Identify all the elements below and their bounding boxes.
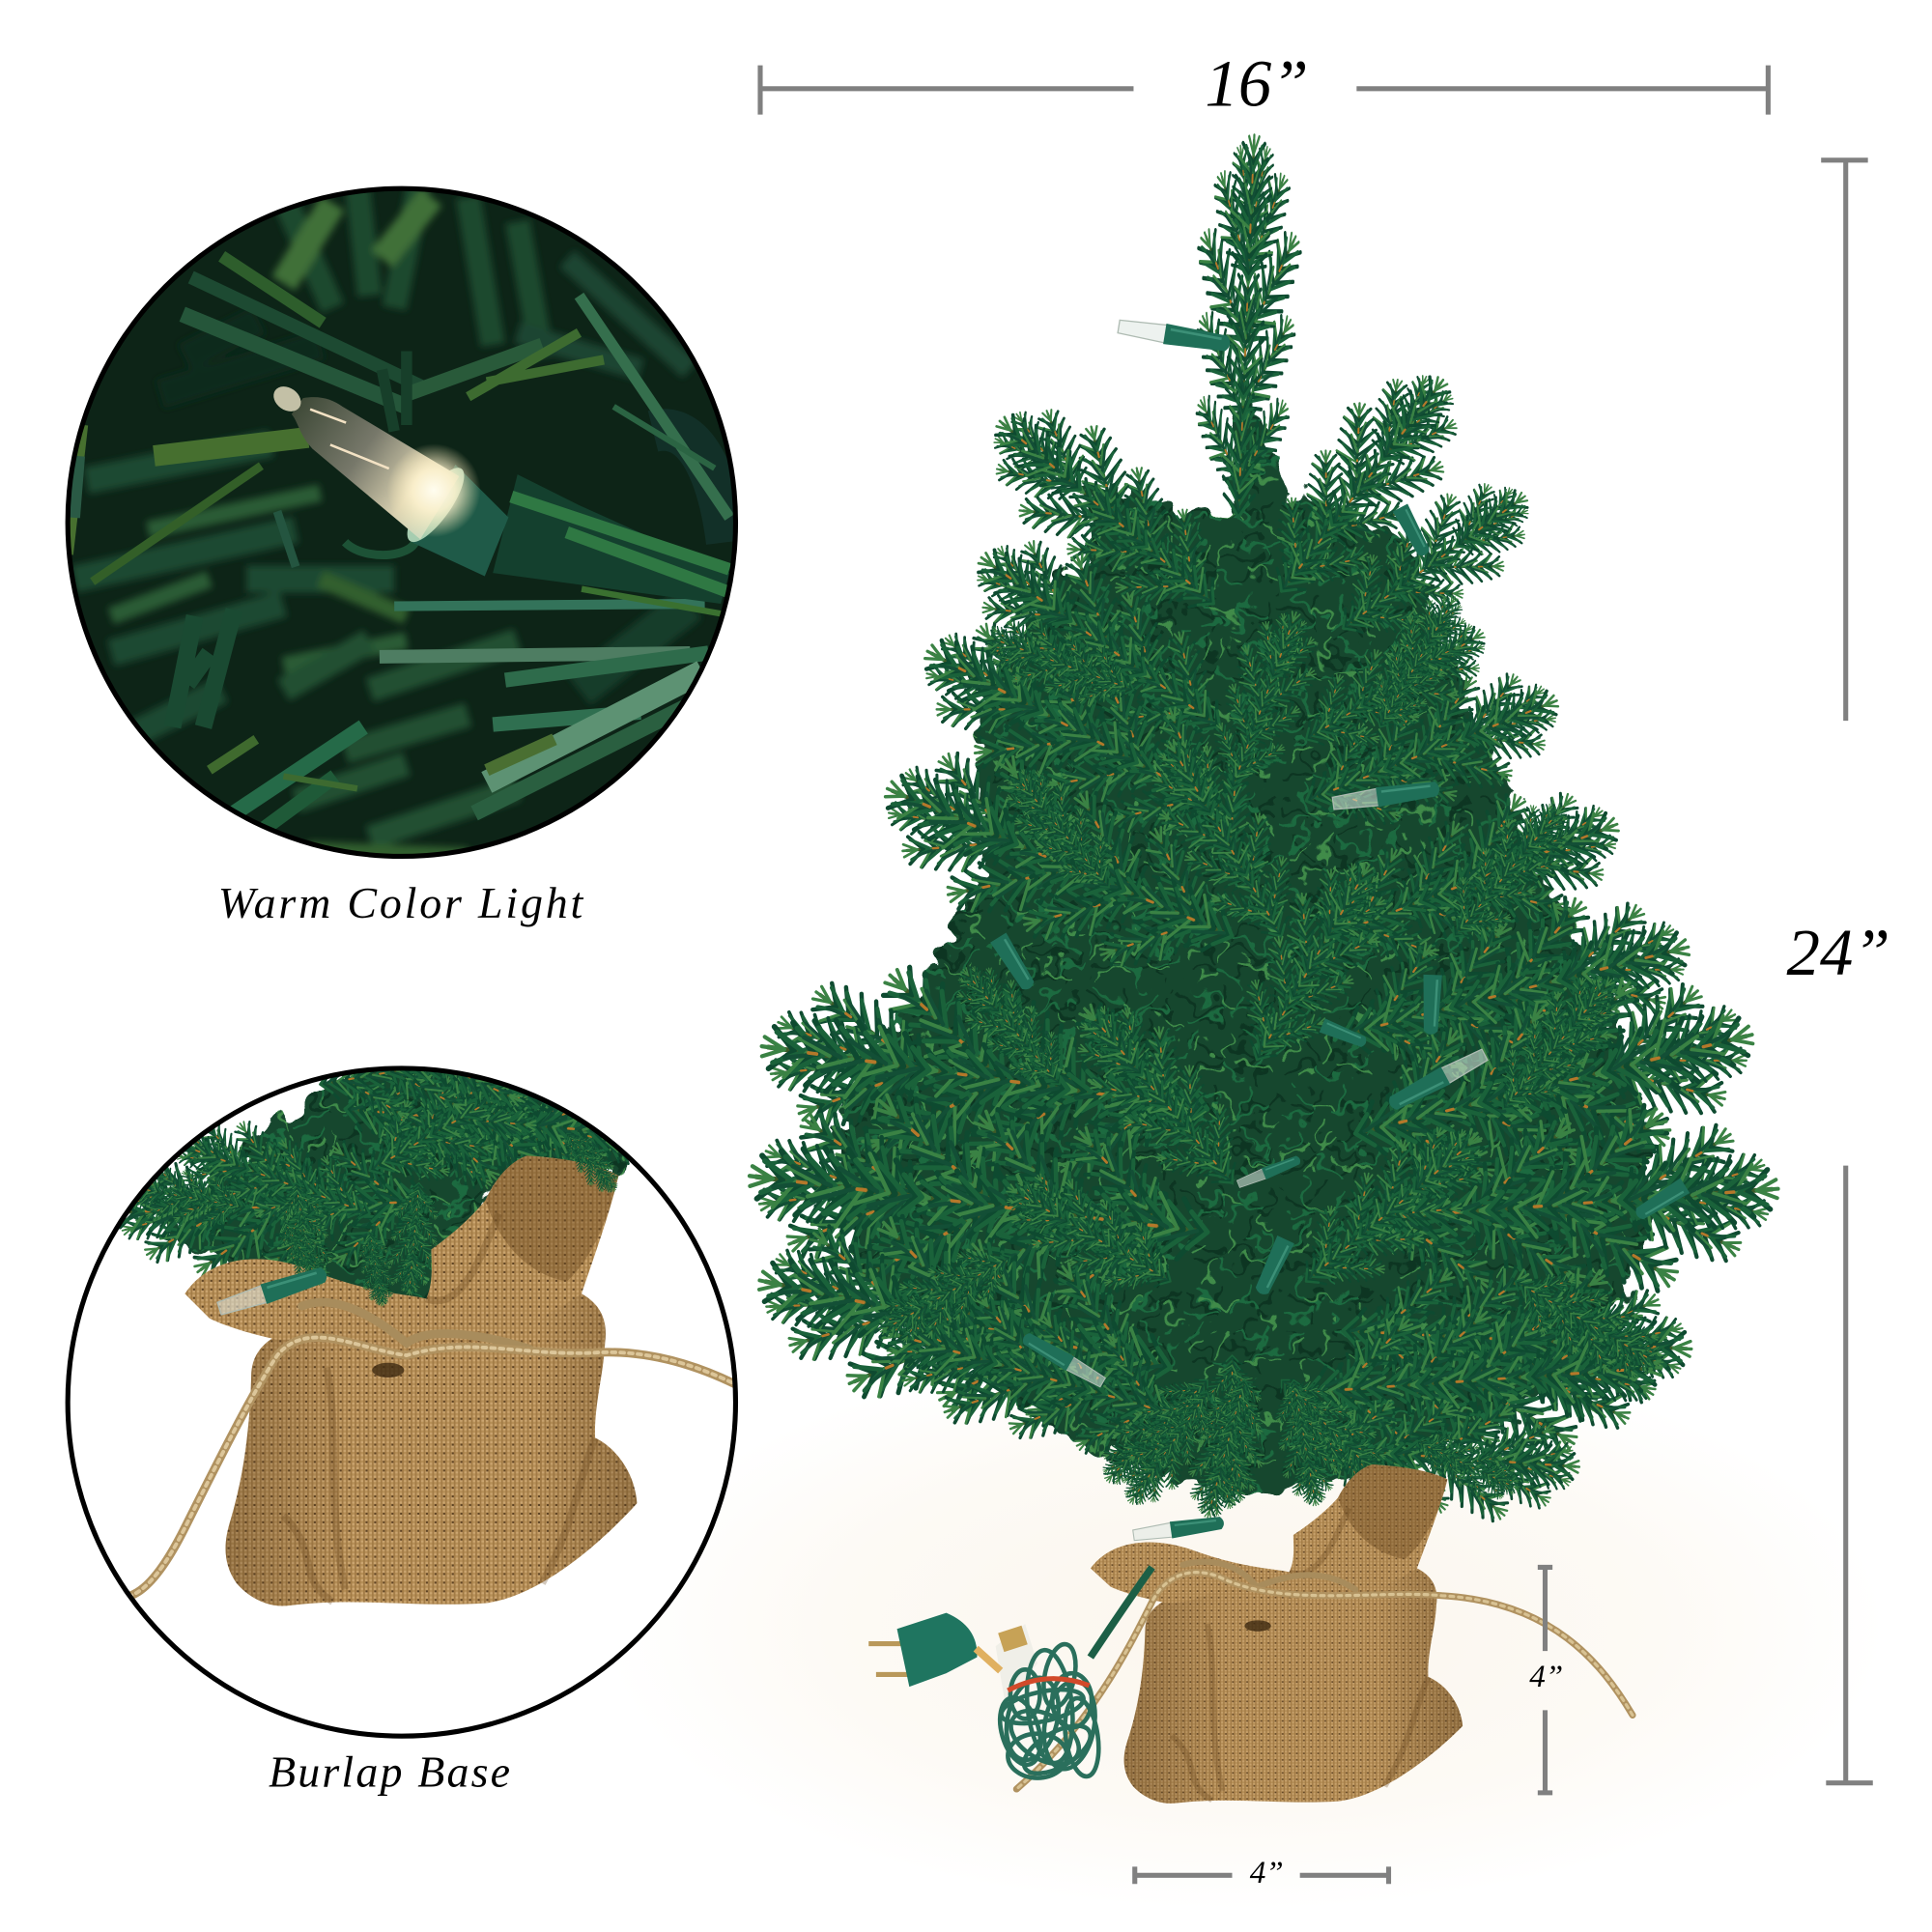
burlap base [1091, 1464, 1463, 1804]
circle frame [68, 188, 735, 856]
label base height: 4” [1529, 1659, 1563, 1694]
panel: warm color light close-up [62, 183, 742, 863]
dark wire [653, 430, 727, 542]
caption: warm color light: Warm Color Light [218, 878, 584, 927]
needles across socket [511, 497, 729, 591]
label 24 inches: 24” [1786, 916, 1890, 989]
mini light bulb [273, 386, 508, 576]
needles over sack flap [280, 1133, 618, 1306]
panel: burlap base close-up [66, 1065, 738, 1739]
dimension: width 16 in [760, 47, 1768, 121]
sack twine [130, 1302, 739, 1596]
bulb socket base [493, 474, 729, 604]
dimension: base height 4 in [1529, 1567, 1563, 1793]
tree branches [735, 132, 1786, 1537]
photo: main tree [735, 132, 1786, 1804]
twine [1016, 1562, 1633, 1789]
burlap sack [185, 1155, 637, 1606]
tree body [838, 407, 1658, 1491]
label base width: 4” [1250, 1855, 1284, 1890]
label 16 inches: 16” [1205, 47, 1309, 121]
dimension: height 24 in [1786, 160, 1890, 1783]
sack bulb [216, 1267, 327, 1316]
caption: burlap base: Burlap Base [269, 1747, 510, 1796]
background floor glow [604, 1343, 1886, 1910]
electric plug and wire coil [868, 1567, 1152, 1783]
tree light bulbs [990, 316, 1690, 1390]
lower needles and bulb over burlap [1101, 1371, 1349, 1544]
circle frame [68, 1068, 735, 1736]
dimension: base width 4 in [1135, 1855, 1389, 1890]
foreground needles [69, 256, 729, 828]
bulb glow [387, 443, 480, 537]
branch foliage [119, 1070, 630, 1298]
blurred background needles [74, 185, 690, 856]
